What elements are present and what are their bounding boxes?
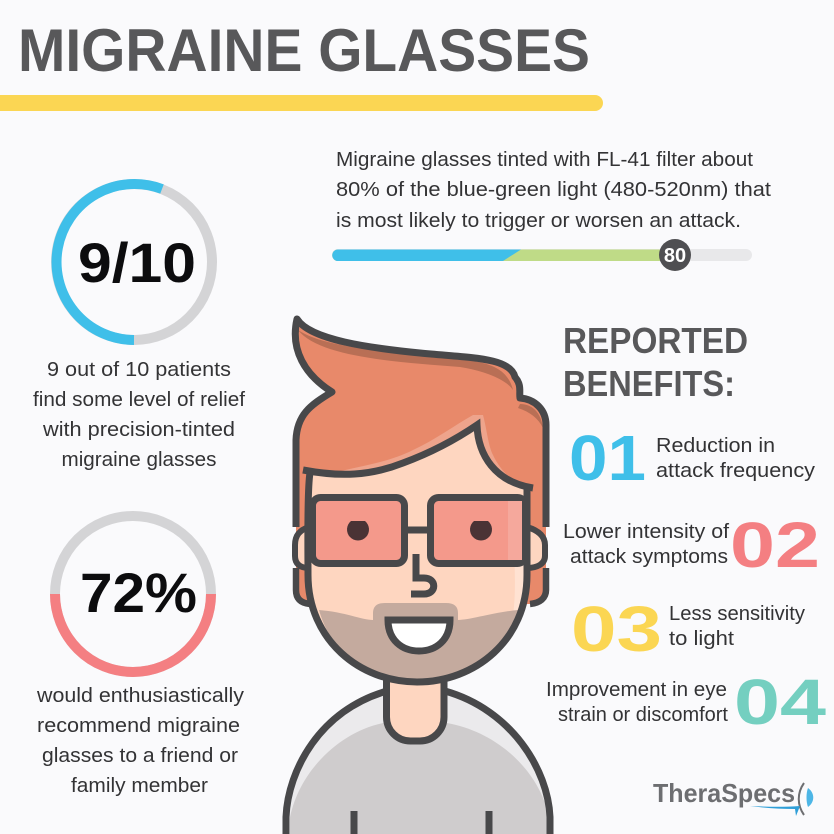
benefit 03: to light — [669, 628, 734, 650]
lower side hair outline — [296, 568, 546, 604]
stat caption: 9 out of 10 — [33, 359, 245, 471]
ears — [295, 527, 545, 568]
intro text block: 80% of the blue-green light (480-520nm) that — [336, 179, 771, 201]
benefit 02: 02 — [730, 509, 820, 581]
stat caption: 9 out of 10: 9 out of 10 patients — [47, 359, 231, 381]
heading: reported benefits: BENEFITS: — [563, 363, 735, 404]
benefit 04 — [546, 666, 827, 738]
heading: reported benefits: REPORTED — [563, 320, 748, 361]
glasses — [312, 498, 526, 564]
stat ring: 72%: 72% — [80, 561, 197, 624]
stat ring: 72% — [55, 516, 211, 672]
benefit 04: 04 — [734, 666, 827, 738]
stat ring: 9/10: 9/10 — [78, 231, 196, 294]
title underline bar — [0, 95, 603, 111]
stat caption: 72%: recommend migraine — [37, 715, 240, 737]
back hair — [295, 319, 546, 604]
stat caption: 72%: glasses to a friend or — [42, 745, 238, 767]
stat caption: 72% — [36, 685, 244, 797]
progress bar: 80 percent — [332, 239, 752, 271]
stat caption: 9 out of 10: find some level of relief — [33, 389, 245, 411]
logo: TheraSpecs: TheraSpecs — [653, 778, 795, 808]
benefit 02 — [563, 509, 820, 581]
benefit 01: 01 — [569, 422, 646, 494]
eyes — [347, 521, 492, 540]
title: MIGRAINE GLASSES — [18, 17, 590, 84]
stat ring: 9/10 — [56, 184, 212, 340]
face highlight — [510, 495, 525, 632]
benefit 02: Lower intensity of — [563, 521, 729, 543]
benefit 04: strain or discomfort — [558, 704, 728, 726]
benefit 04: Improvement in eye — [546, 679, 727, 701]
mouth — [388, 620, 450, 651]
front hair — [295, 319, 546, 527]
benefit 03 — [571, 593, 805, 665]
benefit 03: Less sensitivity — [669, 603, 805, 625]
benefit 02: attack symptoms — [570, 546, 728, 568]
face — [308, 420, 527, 682]
stat caption: 9 out of 10: with precision-tinted — [42, 419, 235, 441]
intro text block: is most likely to trigger or worsen an attack. — [336, 210, 741, 232]
stat caption: 72%: would enthusiastically — [36, 685, 244, 707]
benefit 01: attack frequency — [656, 460, 815, 482]
progress bar: 80 percent: 80 — [664, 245, 686, 267]
body and shirt — [285, 691, 551, 834]
benefit 01 — [569, 422, 815, 494]
stat caption: 9 out of 10: migraine glasses — [62, 449, 216, 471]
face outline — [308, 473, 527, 682]
intro text block — [336, 149, 771, 232]
stat caption: 72%: family member — [71, 775, 208, 797]
benefit 01: Reduction in — [656, 435, 775, 457]
beard — [319, 603, 518, 682]
character illustration — [285, 319, 551, 834]
nose — [411, 554, 434, 594]
heading: reported benefits — [563, 320, 748, 404]
benefit 03: 03 — [571, 593, 662, 665]
neck — [386, 675, 444, 741]
intro text block: Migraine glasses tinted with FL-41 filter about — [336, 149, 753, 171]
